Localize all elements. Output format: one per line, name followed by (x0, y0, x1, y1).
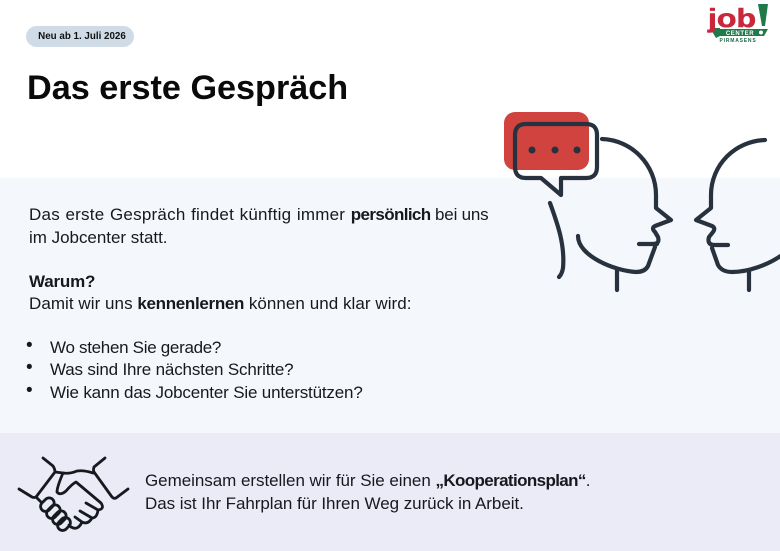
icon: right head (696, 140, 780, 290)
list: questions: • (26, 357, 33, 378)
list: questions: Was sind Ihre nächsten Schritte? (50, 360, 293, 379)
text block: why: Damit wir uns kennenlernen können und klar wird: (29, 294, 412, 313)
panel: main text background (0, 178, 780, 433)
list: questions: Wie kann das Jobcenter Sie unterstützen? (50, 383, 363, 402)
text block: cooperation plan: Das ist Ihr Fahrplan für Ihren Weg zurück in Arbeit. (145, 494, 524, 513)
text block: intro: Das erste Gespräch findet künftig immer persönlich bei uns (29, 205, 488, 224)
icon: speech bubble (504, 112, 597, 195)
list: questions (26, 335, 363, 402)
text block: intro: im Jobcenter statt. (29, 228, 168, 247)
panel: bottom band (0, 433, 780, 551)
list: questions: Wo stehen Sie gerade? (50, 338, 221, 357)
text block: why (29, 272, 412, 313)
text block: cooperation plan: Gemeinsam erstellen wir für Sie einen „Kooperationsplan“. (145, 471, 590, 490)
list: questions: • (26, 380, 33, 401)
date badge (26, 26, 134, 47)
text block: intro (29, 205, 488, 247)
text block: why: Warum? (29, 272, 95, 291)
list: questions: • (26, 335, 33, 356)
icon: left head (550, 139, 671, 290)
title: Das erste Gespräch (27, 69, 348, 107)
text block: cooperation plan (145, 471, 590, 513)
logo: Jobcenter Pirmasens (707, 3, 768, 44)
logo: Jobcenter Pirmasens: job (707, 3, 756, 33)
date badge: Neu ab 1. Juli 2026 (38, 31, 126, 42)
logo: Jobcenter Pirmasens: PIRMASENS (720, 38, 756, 44)
logo: Jobcenter Pirmasens: CENTER (726, 31, 754, 37)
